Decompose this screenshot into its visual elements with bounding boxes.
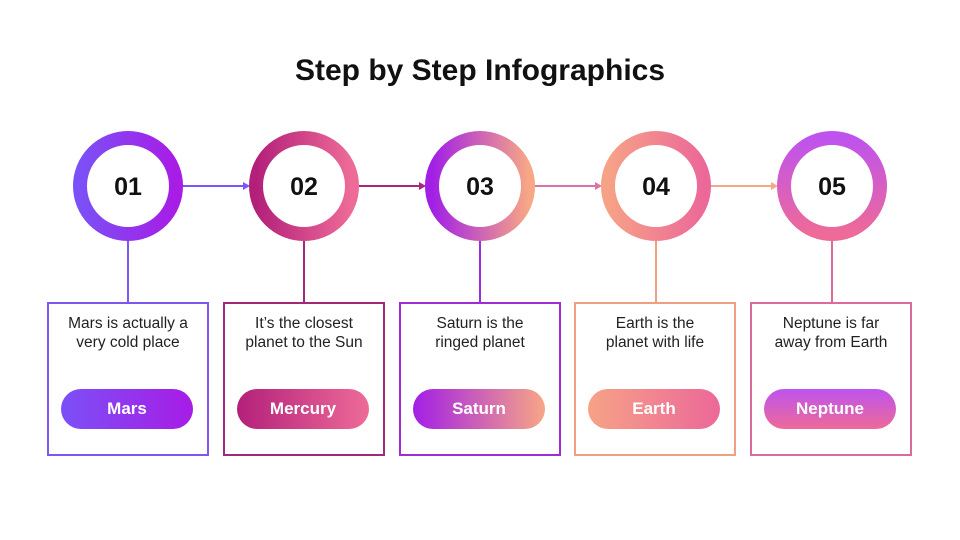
panel: Mars bbox=[47, 302, 209, 456]
panel: Mercury: planet to the Sun bbox=[245, 334, 363, 351]
panel: Neptune: Neptune is far bbox=[783, 315, 879, 332]
panel: Mercury bbox=[223, 302, 385, 456]
arrow 2 to 3 bbox=[359, 182, 426, 190]
panel: Earth bbox=[574, 302, 736, 456]
panel: Neptune: away from Earth bbox=[775, 334, 887, 351]
circle 05: 05 bbox=[818, 173, 846, 201]
connector lines bbox=[128, 240, 832, 303]
pill: Mars bbox=[61, 389, 193, 429]
title: Step by Step Infographics bbox=[295, 54, 665, 87]
panel: Saturn: Saturn is the bbox=[436, 315, 524, 332]
panel: Neptune bbox=[750, 302, 912, 456]
arrow 3 to 4 bbox=[535, 182, 602, 190]
panel: Saturn bbox=[399, 302, 561, 456]
pill: Earth bbox=[588, 389, 720, 429]
pill: Mercury: Mercury bbox=[270, 399, 336, 418]
circle 02 bbox=[256, 138, 352, 234]
panel: Mars: very cold place bbox=[76, 334, 180, 351]
panel: Earth: planet with life bbox=[606, 334, 704, 351]
circle 05 bbox=[784, 138, 880, 234]
circle 04: 04 bbox=[642, 173, 670, 201]
panel: Mercury: It’s the closest bbox=[255, 315, 353, 332]
pill: Mercury bbox=[237, 389, 369, 429]
arrow 1 to 2 bbox=[183, 182, 250, 190]
pill: Saturn: Saturn bbox=[452, 399, 506, 418]
pill: Saturn bbox=[413, 389, 545, 429]
pill: Mars: Mars bbox=[107, 399, 147, 418]
pill: Earth: Earth bbox=[632, 399, 676, 418]
arrow 4 to 5 bbox=[711, 182, 778, 190]
circle 02: 02 bbox=[290, 173, 318, 201]
pill: Neptune: Neptune bbox=[796, 399, 864, 418]
pill: Neptune bbox=[764, 389, 896, 429]
circle 03 bbox=[432, 138, 528, 234]
panel: Mars: Mars is actually a bbox=[68, 315, 188, 332]
circle 04 bbox=[608, 138, 704, 234]
panel: Saturn: ringed planet bbox=[435, 334, 525, 351]
circle 01 bbox=[80, 138, 176, 234]
panel: Earth: Earth is the bbox=[616, 315, 694, 332]
circle 01: 01 bbox=[114, 173, 142, 201]
circle 03: 03 bbox=[466, 173, 494, 201]
